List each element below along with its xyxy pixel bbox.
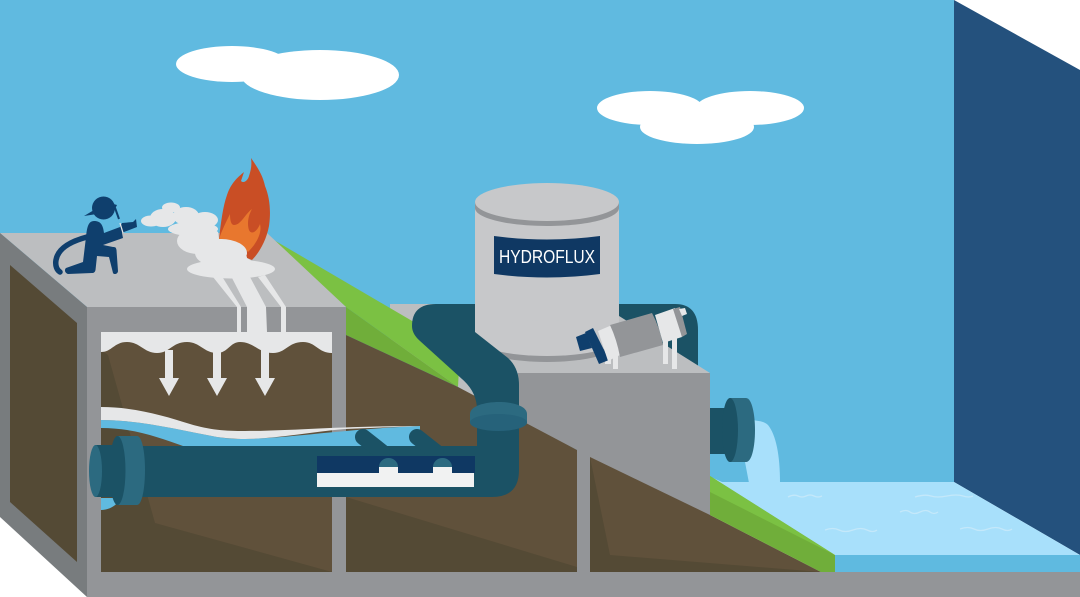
foam layer with arrows bbox=[101, 332, 332, 396]
ripples bbox=[788, 495, 1012, 532]
water front edge bbox=[835, 555, 1080, 573]
grass shade bbox=[346, 307, 458, 387]
right wall bbox=[954, 0, 1080, 555]
back pipe bbox=[600, 304, 698, 368]
outlet pipe bbox=[705, 398, 755, 462]
device white section bbox=[598, 325, 620, 361]
middle soil window bbox=[346, 335, 577, 572]
inline device bbox=[576, 307, 687, 369]
pipe collar bbox=[470, 402, 527, 423]
lower water spill bbox=[101, 498, 122, 510]
device grey body bbox=[610, 313, 663, 357]
branch stubs bbox=[363, 437, 436, 452]
clouds bbox=[176, 46, 804, 144]
pipe flange bbox=[117, 436, 145, 505]
upper grass slope bbox=[267, 236, 460, 387]
device flange bbox=[585, 328, 609, 364]
lower grass slope bbox=[710, 476, 835, 572]
nozzle band bbox=[120, 223, 123, 233]
concrete slab top bbox=[0, 233, 346, 307]
outlet flange bbox=[730, 398, 755, 462]
dome 2 bbox=[433, 458, 452, 467]
arrow 1 bbox=[159, 350, 179, 396]
device tip bbox=[679, 308, 687, 316]
hose bbox=[56, 237, 87, 272]
treatment block front bbox=[500, 373, 821, 572]
slab front frame bbox=[87, 307, 1080, 597]
arrow 2 bbox=[207, 350, 227, 396]
logo text: HYDROFLUX bbox=[499, 246, 595, 267]
helmet peak bbox=[110, 203, 117, 207]
body bbox=[65, 219, 137, 274]
helmet strap bbox=[114, 205, 119, 219]
foam band bbox=[101, 407, 420, 439]
dome 1 bbox=[379, 458, 398, 467]
tank lid bbox=[475, 183, 619, 221]
pipe cutaway window bbox=[317, 456, 475, 487]
device grey strip bbox=[673, 307, 687, 337]
outlet waterfall bbox=[745, 420, 780, 483]
treatment block top bbox=[390, 304, 710, 398]
main pipe bbox=[89, 304, 527, 505]
flame bbox=[219, 158, 270, 260]
helmet and head bbox=[92, 196, 115, 220]
tank lid rim bbox=[475, 202, 619, 226]
slab left face bbox=[0, 233, 87, 597]
sky backdrop bbox=[0, 0, 954, 483]
foam drips bbox=[213, 277, 241, 332]
right soil window bbox=[590, 457, 821, 572]
inner flame bbox=[219, 209, 260, 252]
device white collar bbox=[655, 308, 682, 343]
firefighter bbox=[56, 196, 137, 274]
storage tank bbox=[475, 183, 619, 362]
device end cap bbox=[576, 333, 592, 351]
water surface bbox=[711, 477, 1080, 573]
pipe end cap bbox=[95, 445, 115, 497]
helmet brim bbox=[84, 210, 97, 216]
foam cloud and drips bbox=[141, 202, 286, 332]
left soil window bbox=[10, 265, 77, 562]
logo plate bbox=[494, 236, 600, 278]
arrow 3 bbox=[255, 350, 275, 396]
front soil window bbox=[101, 332, 332, 572]
underground water flow bbox=[101, 407, 420, 510]
